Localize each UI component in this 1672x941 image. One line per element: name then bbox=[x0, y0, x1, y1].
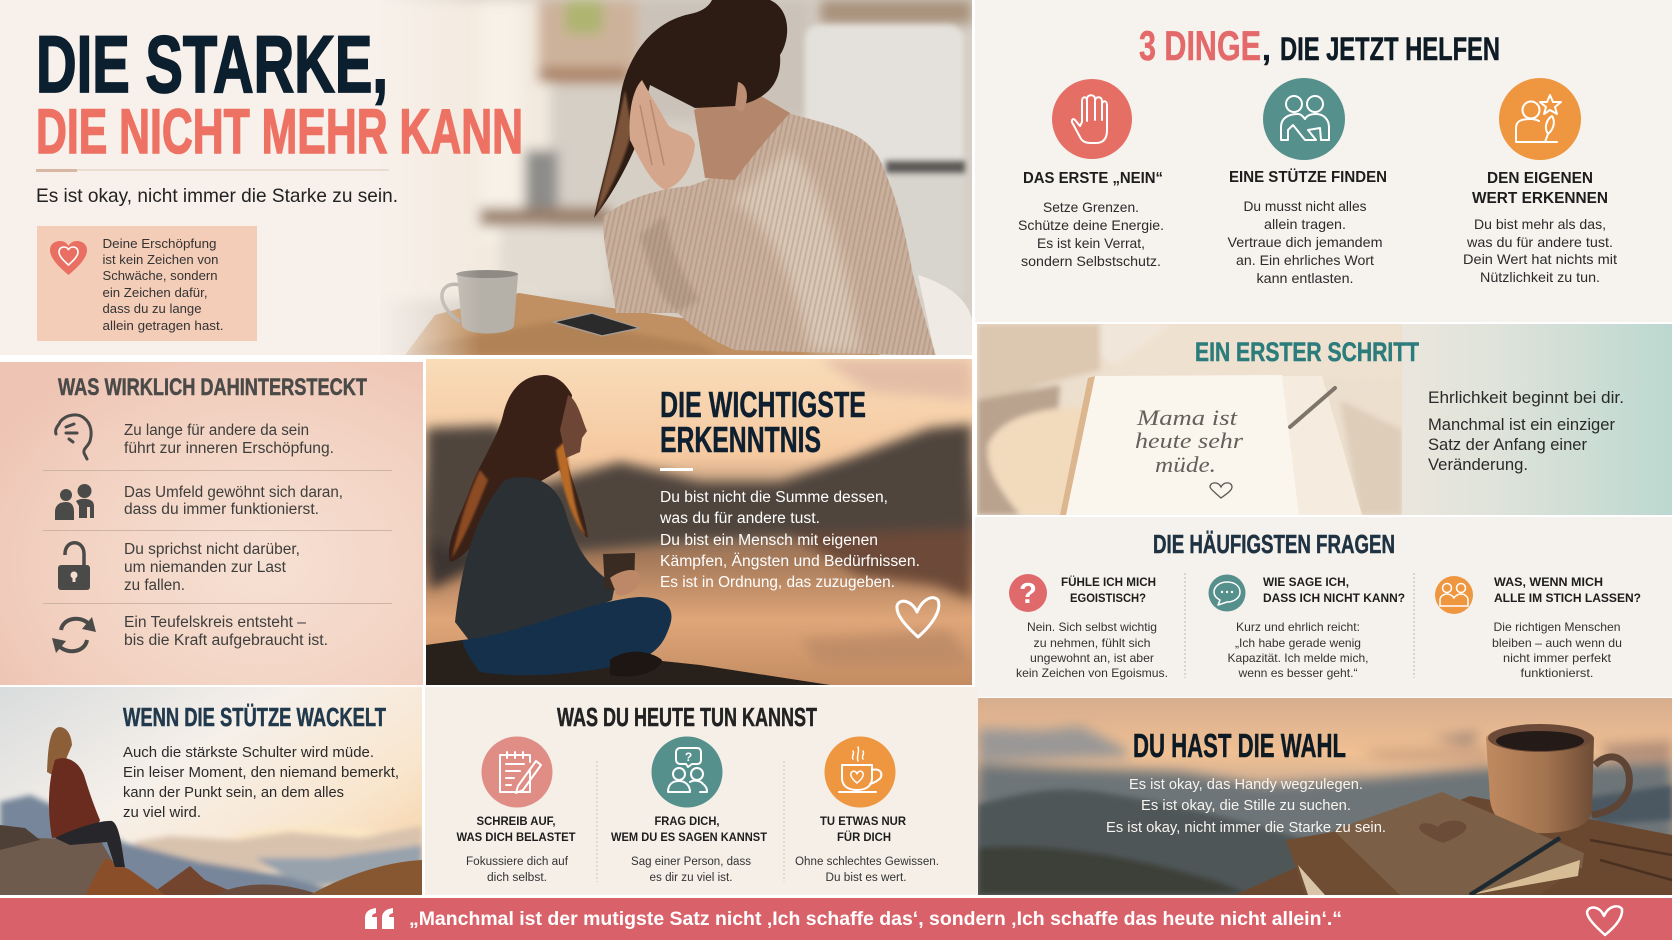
panel: 3 Dinge bbox=[975, 0, 1672, 322]
icon: people bbox=[55, 484, 94, 520]
text: Manchmal ist ein einziger bbox=[1428, 416, 1616, 434]
icon: quotation marks bbox=[365, 908, 394, 929]
lower book bbox=[1286, 832, 1350, 868]
hero left fade bbox=[0, 0, 480, 355]
text: sondern Selbstschutz. bbox=[1021, 253, 1161, 269]
icon: hand bbox=[1052, 79, 1132, 159]
callout bbox=[37, 226, 257, 341]
answer: Die richtigen Menschen bbox=[1494, 620, 1620, 634]
answer: zu nehmen, fühlt sich bbox=[1034, 636, 1150, 650]
text: Kämpfen, Ängsten und Bedürfnissen. bbox=[660, 553, 920, 570]
heading: DEN EIGENEN bbox=[1487, 170, 1593, 187]
heading: , bbox=[1262, 31, 1271, 67]
hair bbox=[594, 0, 787, 218]
answer: kein Zeichen von Egoismus. bbox=[1016, 666, 1168, 680]
pages bbox=[1282, 376, 1362, 515]
text: Du bist mehr als das, bbox=[1474, 216, 1606, 232]
heading: WERT ERKENNEN bbox=[1472, 190, 1608, 207]
text bbox=[1106, 776, 1386, 836]
photo: woman on dock at lake bbox=[426, 359, 972, 685]
answer: Nein. Sich selbst wichtig bbox=[1027, 620, 1157, 634]
text bbox=[124, 541, 300, 594]
text: zu fallen. bbox=[124, 577, 185, 594]
row 4 bbox=[52, 614, 328, 653]
question: WIE SAGE ICH, bbox=[1263, 575, 1349, 589]
title: DIE NICHT MEHR KANN bbox=[36, 97, 523, 167]
faq 1 bbox=[1009, 574, 1168, 680]
callout text: allein getragen hast. bbox=[102, 318, 224, 333]
question: EGOISTISCH? bbox=[1070, 591, 1146, 605]
text: Sag einer Person, dass bbox=[631, 856, 751, 868]
answer: wenn es besser geht.“ bbox=[1237, 666, 1358, 680]
text: an. Ein ehrliches Wort bbox=[1236, 252, 1374, 268]
row 3 bbox=[58, 541, 300, 594]
action 2 bbox=[611, 736, 767, 884]
text: Auch die stärkste Schulter wird müde. bbox=[123, 744, 374, 761]
callout text: Schwäche, sondern bbox=[102, 268, 218, 283]
sweater bbox=[603, 113, 936, 356]
text: dass du immer funktionierst. bbox=[124, 501, 319, 518]
text: bis die Kraft aufgebraucht ist. bbox=[124, 632, 328, 649]
hero photo: woman at kitchen table bbox=[380, 0, 972, 356]
mug bbox=[442, 270, 518, 334]
faq 3 bbox=[1435, 575, 1641, 680]
text: Dein Wert hat nichts mit bbox=[1463, 251, 1617, 267]
text: um niemanden zur Last bbox=[124, 559, 287, 576]
heading bbox=[456, 816, 576, 844]
question bbox=[1263, 575, 1405, 605]
table bbox=[405, 293, 880, 355]
icon: heart bbox=[50, 241, 87, 275]
heading: FÜR DICH bbox=[837, 831, 891, 844]
text: Satz der Anfang einer bbox=[1428, 436, 1587, 454]
handwriting bbox=[1135, 405, 1244, 477]
table bbox=[1235, 796, 1672, 895]
text: Vertraue dich jemandem bbox=[1228, 234, 1382, 250]
heading: WEM DU ES SAGEN KANNST bbox=[611, 832, 767, 844]
question: DASS ICH NICHT KANN? bbox=[1263, 591, 1405, 605]
heading: WAS DICH BELASTET bbox=[456, 832, 576, 844]
text: Du bist ein Mensch mit eigenen bbox=[660, 532, 878, 549]
jeans bbox=[462, 597, 671, 675]
text: Du bist nicht die Summe dessen, bbox=[660, 489, 888, 506]
answer: Kapazität. Ich melde mich, bbox=[1228, 651, 1368, 665]
row 1 bbox=[56, 415, 334, 459]
text bbox=[124, 422, 334, 457]
text: Du sprichst nicht darüber, bbox=[124, 541, 300, 558]
answer: ungewohnt an, ist aber bbox=[1030, 651, 1154, 665]
heading bbox=[820, 816, 907, 844]
face bbox=[560, 395, 587, 458]
text: was du für andere tust. bbox=[659, 510, 820, 527]
icon: small heart bbox=[1210, 483, 1232, 498]
answer: funktionierst. bbox=[1520, 666, 1594, 680]
mug and hands bbox=[603, 553, 635, 590]
heading: WAS DU HEUTE TUN KANNST bbox=[557, 702, 817, 732]
callout text bbox=[102, 236, 224, 333]
book heart bbox=[1419, 821, 1466, 843]
icon: speech bubble bbox=[1208, 574, 1246, 612]
faq 2 bbox=[1208, 574, 1405, 680]
text: Du bist es wert. bbox=[826, 872, 906, 884]
icon: white heart bbox=[897, 598, 939, 637]
subtitle: Es ist okay, nicht immer die Starke zu sein. bbox=[36, 185, 398, 207]
callout text: dass du zu lange bbox=[102, 301, 202, 316]
quote bar bbox=[0, 898, 1672, 940]
text bbox=[795, 856, 939, 884]
heading bbox=[660, 384, 866, 460]
heading bbox=[1472, 170, 1608, 207]
heading: DIE HÄUFIGSTEN FRAGEN bbox=[1153, 529, 1395, 559]
mug bbox=[1592, 757, 1629, 815]
icon: question bubble and people bbox=[652, 736, 722, 808]
icon: two people bbox=[1263, 78, 1345, 160]
text bbox=[466, 856, 569, 884]
text: Nützlichkeit zu tun. bbox=[1480, 269, 1600, 285]
panel: die haeufigsten fragen bbox=[975, 517, 1672, 697]
text bbox=[123, 744, 399, 821]
chair bbox=[918, 275, 972, 355]
heading: SCHREIB AUF, bbox=[476, 816, 556, 828]
title: DIE STARKE, bbox=[36, 20, 388, 110]
icon: person with star bbox=[1499, 78, 1581, 160]
answer: bleiben – auch wenn du bbox=[1492, 636, 1622, 650]
text: zu viel wird. bbox=[123, 804, 201, 821]
phone bbox=[553, 313, 640, 336]
divider bbox=[36, 169, 389, 172]
text: Es ist okay, die Stille zu suchen. bbox=[1141, 797, 1351, 814]
heading: 3 DINGE bbox=[1139, 22, 1261, 69]
heading: FRAG DICH, bbox=[654, 816, 720, 828]
heading: DIE WICHTIGSTE bbox=[660, 384, 866, 425]
handwriting: heute sehr bbox=[1135, 428, 1244, 453]
question bbox=[1494, 575, 1641, 605]
question bbox=[1061, 574, 1156, 605]
sweater bbox=[455, 477, 615, 655]
heading: DAS ERSTE „NEIN“ bbox=[1023, 170, 1163, 187]
icon: people bbox=[1435, 576, 1473, 614]
heading: ERKENNTNIS bbox=[660, 419, 821, 460]
text: Es ist okay, nicht immer die Starke zu sein. bbox=[1106, 819, 1386, 836]
icon: head bbox=[56, 415, 91, 459]
text: Das Umfeld gewöhnt sich daran, bbox=[124, 484, 343, 501]
figure bbox=[47, 727, 72, 778]
heading: EINE STÜTZE FINDEN bbox=[1229, 169, 1387, 186]
text: führt zur inneren Erschöpfung. bbox=[124, 440, 334, 457]
text: Setze Grenzen. bbox=[1043, 199, 1139, 215]
column: Wert bbox=[1463, 78, 1617, 285]
hair bbox=[449, 375, 588, 562]
text: Es ist kein Verrat, bbox=[1037, 235, 1145, 251]
text bbox=[1428, 389, 1624, 474]
heading: DU HAST DIE WAHL bbox=[1133, 727, 1346, 764]
dock bbox=[426, 640, 830, 685]
callout text: Deine Erschöpfung bbox=[102, 236, 216, 251]
text: Schütze deine Energie. bbox=[1018, 217, 1164, 233]
panel: wenn die stuetze wackelt bbox=[0, 687, 422, 895]
question: ALLE IM STICH LASSEN? bbox=[1494, 591, 1641, 605]
text bbox=[1018, 199, 1164, 269]
icon: white heart bbox=[1587, 906, 1622, 935]
text: kann entlasten. bbox=[1256, 270, 1354, 286]
icon: question bbox=[1009, 574, 1047, 612]
callout text: ein Zeichen dafür, bbox=[102, 285, 208, 300]
photo: woman on rock at mountains bbox=[0, 687, 422, 895]
text bbox=[631, 856, 751, 884]
icon: lock bbox=[58, 543, 90, 590]
row 2 bbox=[55, 484, 343, 520]
answer: nicht immer perfekt bbox=[1503, 651, 1612, 665]
answer bbox=[1228, 620, 1368, 680]
heading bbox=[611, 816, 767, 844]
icon: notepad bbox=[482, 736, 552, 808]
heading: TU ETWAS NUR bbox=[820, 816, 907, 828]
answer: „Ich habe gerade wenig bbox=[1235, 636, 1361, 650]
icon: tea cup bbox=[824, 736, 896, 808]
heading bbox=[1139, 22, 1500, 69]
pen bbox=[1290, 388, 1335, 427]
icon: cycle bbox=[52, 617, 96, 653]
text: es dir zu viel ist. bbox=[650, 872, 732, 884]
column: Nein bbox=[1018, 79, 1164, 269]
callout text: ist kein Zeichen von bbox=[102, 252, 218, 267]
text: dich selbst. bbox=[487, 872, 547, 884]
photo: notebook bbox=[977, 324, 1402, 515]
action 1 bbox=[456, 736, 576, 884]
answer bbox=[1492, 620, 1622, 680]
handwriting: Mama ist bbox=[1136, 405, 1238, 430]
neck and face bbox=[694, 96, 790, 180]
text: kann der Punkt sein, an dem alles bbox=[123, 784, 344, 801]
text bbox=[1228, 198, 1382, 286]
text: was du für andere tust. bbox=[1466, 234, 1613, 250]
text: Fokussiere dich auf bbox=[466, 856, 569, 868]
hand bbox=[630, 80, 695, 190]
text: Zu lange für andere da sein bbox=[124, 422, 309, 439]
panel: du hast die wahl bbox=[978, 698, 1672, 895]
heading: WAS WIRKLICH DAHINTERSTECKT bbox=[58, 374, 367, 401]
answer: Kurz und ehrlich reicht: bbox=[1236, 620, 1360, 634]
panel: was du heute tun kannst bbox=[425, 687, 978, 895]
action 3 bbox=[795, 736, 939, 884]
rock bbox=[0, 838, 125, 895]
heading: WENN DIE STÜTZE WACKELT bbox=[123, 702, 386, 732]
panel: hero bbox=[0, 0, 972, 356]
text: Ein leiser Moment, den niemand bemerkt, bbox=[123, 764, 399, 781]
heading: DIE JETZT HELFEN bbox=[1280, 31, 1500, 67]
text: Ohne schlechtes Gewissen. bbox=[795, 856, 939, 868]
question: WAS, WENN MICH bbox=[1494, 575, 1603, 589]
column: Stuetze bbox=[1228, 78, 1387, 286]
icon: question bubble and people: ? bbox=[685, 750, 692, 764]
title bbox=[36, 20, 523, 167]
handwriting: müde. bbox=[1155, 452, 1216, 477]
quote text: „Manchmal ist der mutigste Satz nicht ‚Ich schaffe das‘, sondern ‚Ich schaffe das heute nicht allein‘.“ bbox=[409, 909, 1342, 930]
text: allein tragen. bbox=[1264, 216, 1346, 232]
text bbox=[124, 614, 328, 649]
panel: was wirklich dahintersteckt bbox=[0, 362, 423, 685]
answer bbox=[1016, 620, 1168, 680]
text: Ein Teufelskreis entsteht – bbox=[124, 614, 306, 631]
text: Es ist okay, das Handy wegzulegen. bbox=[1129, 776, 1363, 793]
photo: mug and books over mountains bbox=[978, 698, 1672, 895]
upper book bbox=[1333, 792, 1584, 895]
text bbox=[124, 484, 343, 518]
text: Du musst nicht alles bbox=[1244, 198, 1366, 214]
panel: ein erster schritt bbox=[977, 324, 1672, 515]
text: Veränderung. bbox=[1428, 456, 1528, 474]
text: Es ist in Ordnung, das zuzugeben. bbox=[660, 574, 895, 591]
text bbox=[659, 489, 920, 591]
icon: question: ? bbox=[1019, 578, 1037, 610]
heading: EIN ERSTER SCHRITT bbox=[1195, 337, 1419, 367]
text bbox=[1463, 216, 1617, 285]
question: FÜHLE ICH MICH bbox=[1061, 574, 1156, 589]
panel: die wichtigste erkenntnis bbox=[426, 359, 972, 685]
text: Ehrlichkeit beginnt bei dir. bbox=[1428, 389, 1624, 407]
